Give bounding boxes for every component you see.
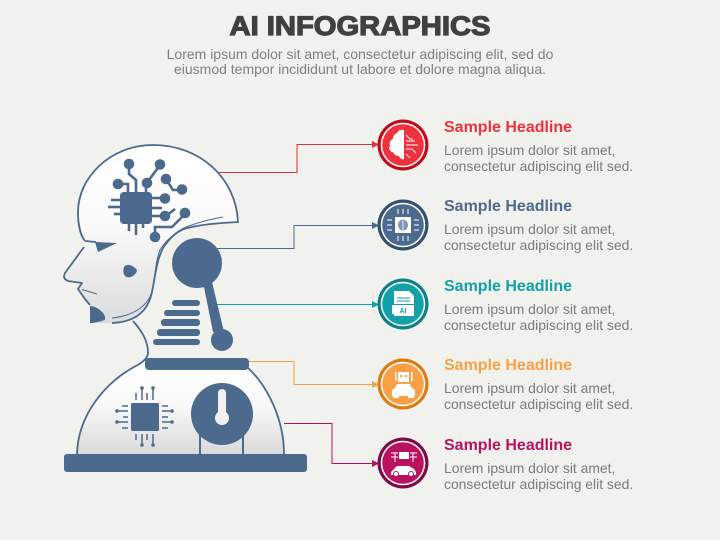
connector: red (218, 141, 379, 172)
body text: consectetur adipiscing elit sed. (444, 476, 633, 492)
subtitle: Lorem ipsum dolor sit amet, consectetur adipiscing elit, sed do (167, 46, 554, 62)
icon: AI document (378, 278, 428, 330)
dial (191, 383, 253, 445)
robot head (64, 145, 238, 351)
item 3: teal (378, 278, 633, 333)
eye (95, 242, 117, 252)
headline: Sample Headline (444, 357, 572, 374)
dial posts (200, 435, 243, 454)
jaw (90, 306, 105, 323)
base (64, 454, 307, 472)
helmet inner line (112, 217, 223, 318)
body text: Lorem ipsum dolor sit amet, (444, 380, 615, 396)
item 5: magenta (378, 437, 633, 492)
torso outline (77, 321, 284, 454)
body text (444, 221, 633, 253)
title: AI INFOGRAPHICS (230, 11, 490, 41)
item 4: orange (378, 357, 633, 412)
headline: Sample Headline (444, 278, 572, 295)
torso fill (77, 361, 284, 454)
collar (145, 358, 249, 370)
body text: consectetur adipiscing elit sed. (444, 237, 633, 253)
body text: Lorem ipsum dolor sit amet, (444, 221, 615, 237)
icon: brain (378, 120, 428, 170)
mouth (82, 290, 97, 294)
body text (444, 142, 633, 174)
brain chip (108, 159, 190, 242)
body text: consectetur adipiscing elit sed. (444, 158, 633, 174)
body text: consectetur adipiscing elit sed. (444, 396, 633, 412)
connector: blue (216, 222, 379, 248)
body text: Lorem ipsum dolor sit amet, (444, 142, 615, 158)
thermometer needle (215, 389, 229, 425)
item 2: blue (378, 198, 633, 253)
subtitle: eiusmod tempor incididunt ut labore et dolore magna aliqua. (174, 61, 546, 77)
icon: circuit car (378, 438, 428, 488)
body text: Lorem ipsum dolor sit amet, (444, 460, 615, 476)
ear (123, 265, 137, 277)
body text: consectetur adipiscing elit sed. (444, 317, 633, 333)
robot body (64, 321, 307, 472)
face profile (64, 247, 90, 305)
subtitle (167, 46, 554, 77)
helmet lower edge (85, 241, 96, 242)
connector: orange (248, 362, 379, 388)
neck bars (153, 300, 200, 345)
headline: Sample Headline (444, 437, 572, 454)
item 1: red (378, 119, 633, 174)
body chip (115, 386, 174, 447)
body text (444, 380, 633, 412)
body text: Lorem ipsum dolor sit amet, (444, 301, 615, 317)
body text (444, 460, 633, 492)
helmet outline (78, 145, 238, 323)
neck rod and ball (172, 238, 233, 351)
icon: chip brain (378, 200, 428, 250)
icon: AI document: AI (400, 308, 407, 315)
connector: magenta (284, 424, 379, 467)
icon: robot car (378, 358, 428, 410)
helmet and face fill (64, 145, 238, 323)
body text (444, 301, 633, 333)
connector: teal (214, 301, 379, 308)
headline: Sample Headline (444, 119, 572, 136)
headline: Sample Headline (444, 198, 572, 215)
